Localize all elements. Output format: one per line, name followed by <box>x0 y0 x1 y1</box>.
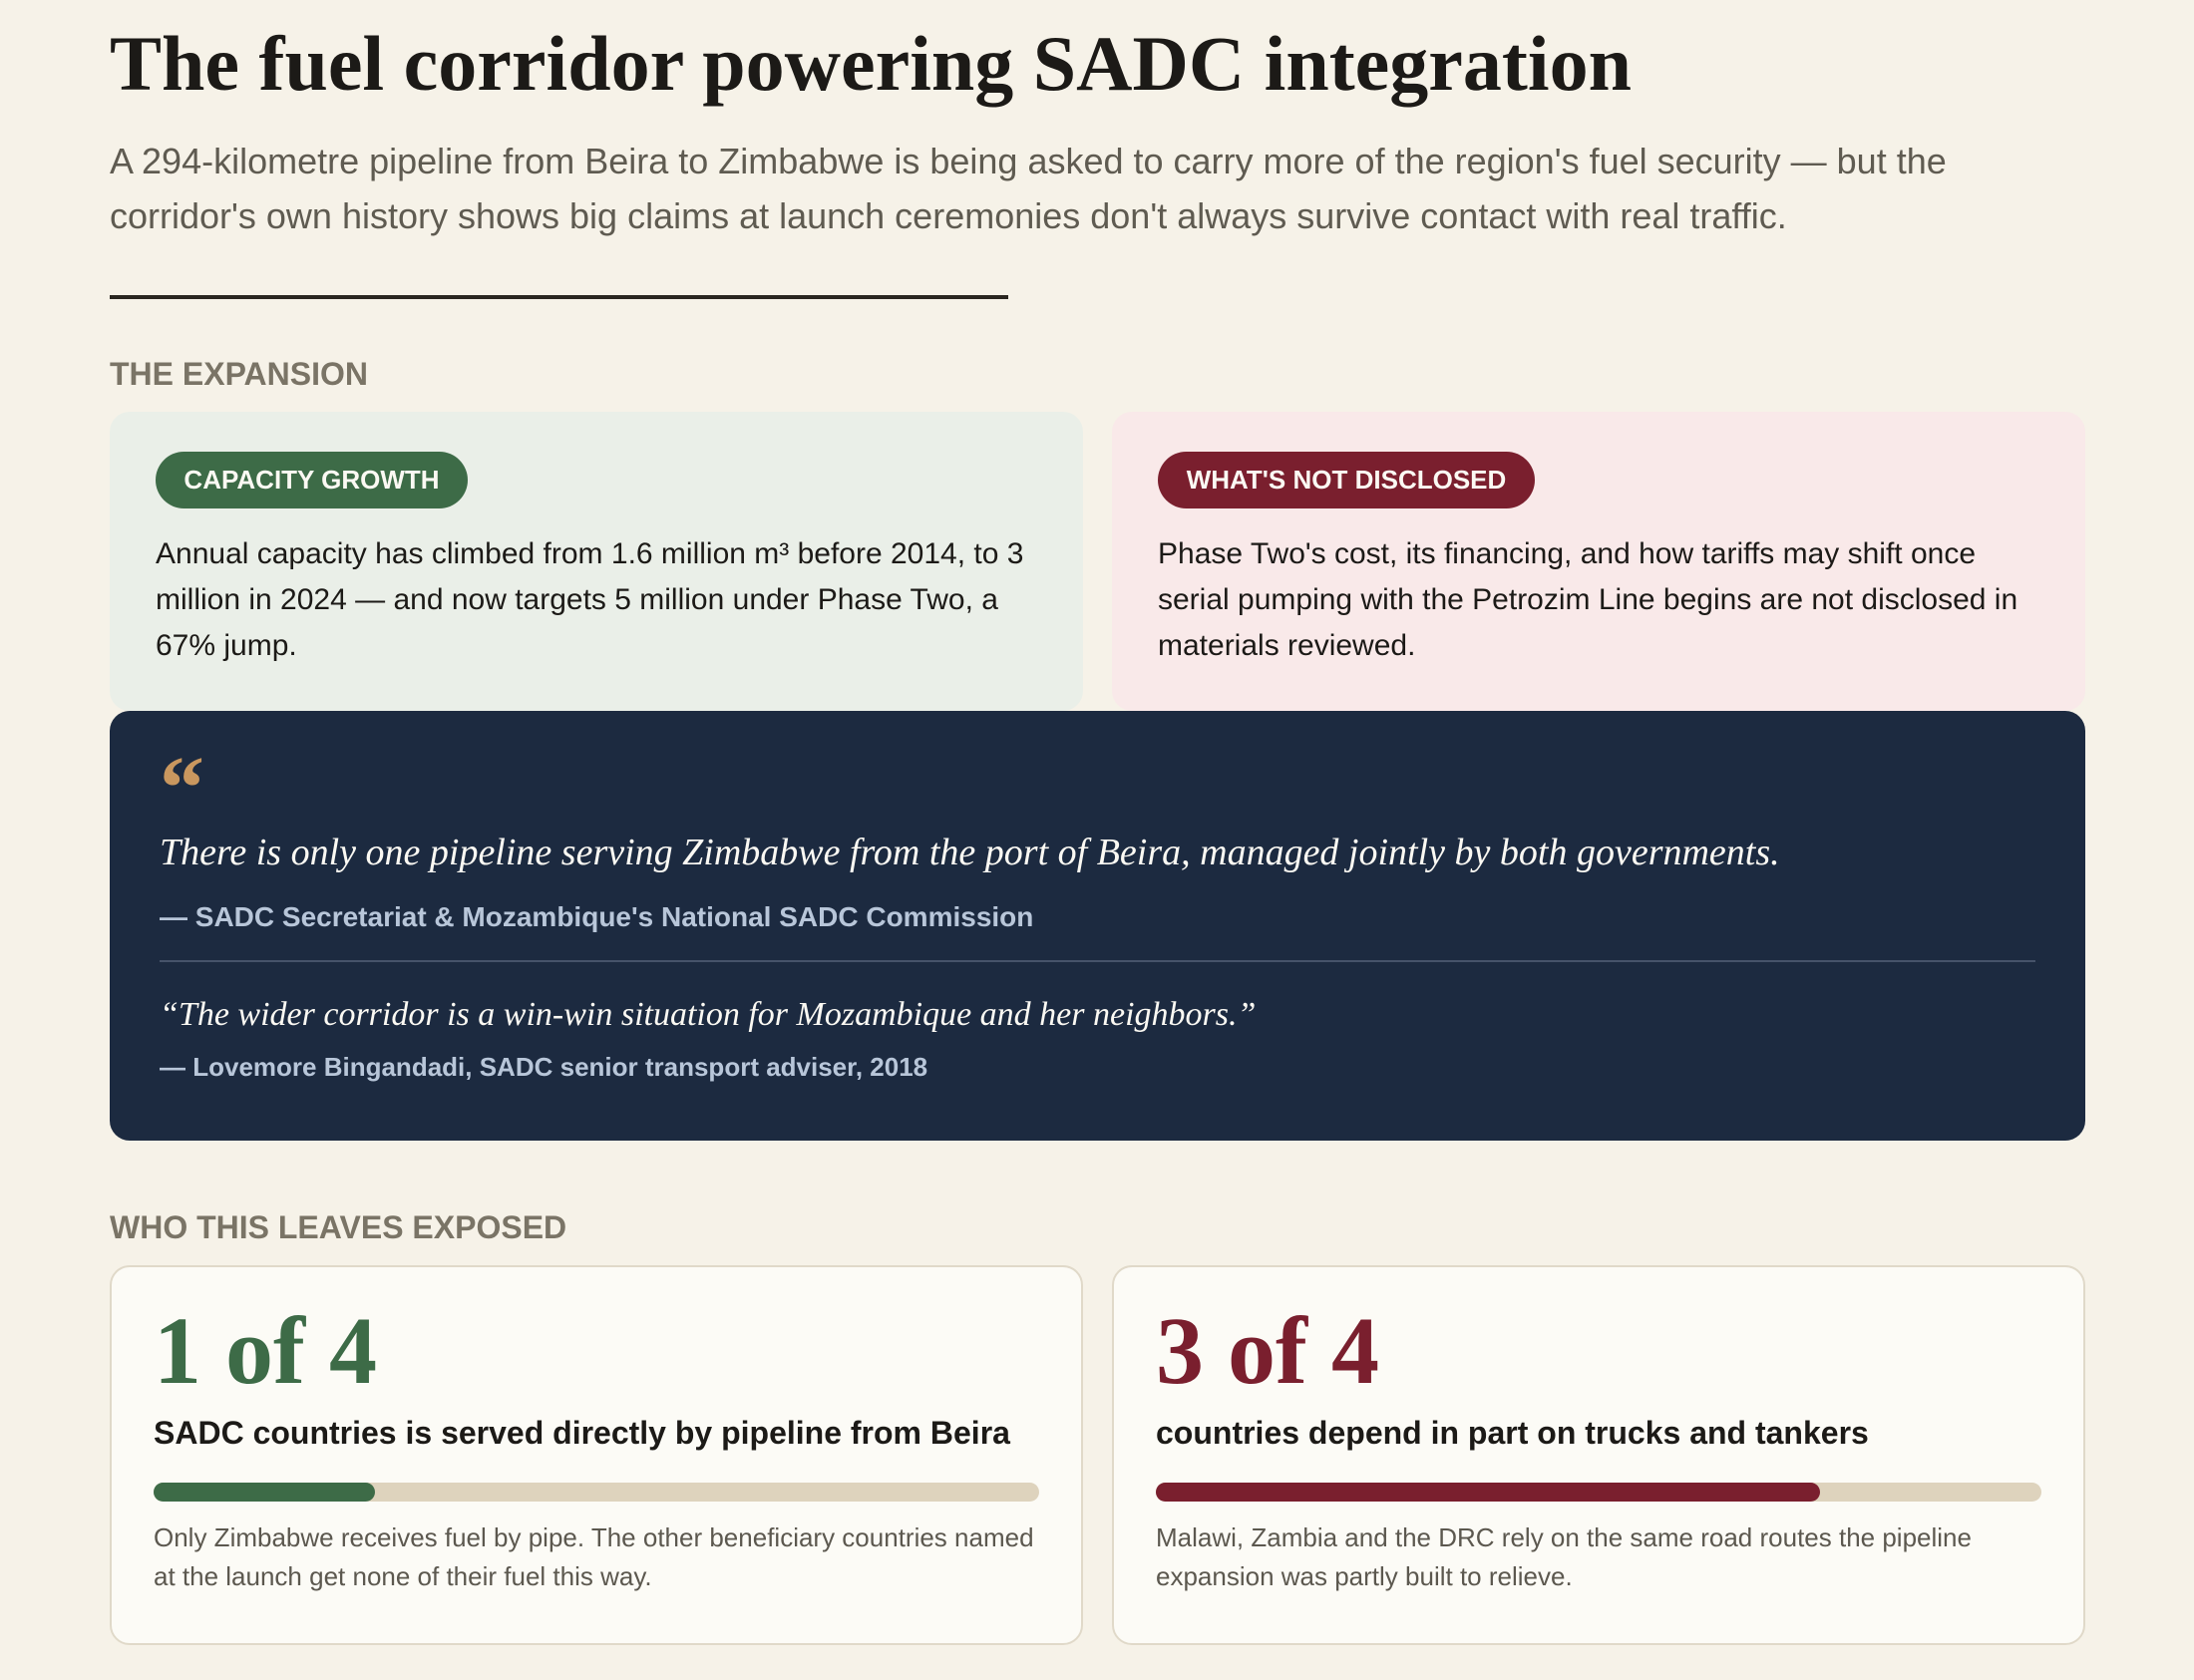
stat note: Malawi, Zambia and the DRC rely on the same road routes the pipeline <box>1156 1522 1972 1552</box>
quote one: There is only one pipeline serving Zimbabwe from the port of Beira, managed jointly by both governments. <box>160 832 1780 873</box>
stat: 3 of 4: 3 of 4 <box>1156 1297 1379 1404</box>
subtitle <box>110 141 1947 236</box>
title: The fuel corridor powering SADC integration <box>110 20 1632 107</box>
stat label: SADC countries is served directly by pipeline from Beira <box>154 1415 1010 1451</box>
panel: what's not disclosed <box>1112 412 2085 711</box>
progress bar: 25% <box>154 1483 1039 1502</box>
disclosure text <box>1158 537 2017 662</box>
badge: capacity growth: CAPACITY GROWTH <box>183 465 440 495</box>
disclosure text: materials reviewed. <box>1158 629 1415 662</box>
quote divider <box>160 960 2035 962</box>
section heading: the expansion: THE EXPANSION <box>110 356 368 392</box>
icon: quote mark: “ <box>160 739 204 838</box>
stat note: at the launch get none of their fuel this way. <box>154 1561 652 1591</box>
stat note <box>154 1522 1034 1591</box>
stat note: expansion was partly built to relieve. <box>1156 1561 1573 1591</box>
panel: capacity growth <box>110 412 1083 711</box>
panel: 1 of 4 <box>110 1265 1083 1645</box>
capacity text <box>156 537 1023 662</box>
capacity text: 67% jump. <box>156 629 297 662</box>
stat note <box>1156 1522 1972 1591</box>
disclosure text: Phase Two's cost, its financing, and how tariffs may shift once <box>1158 537 1976 570</box>
subtitle: corridor's own history shows big claims at launch ceremonies don't always survive contact with real traffic. <box>110 195 1787 236</box>
badge: what's not disclosed <box>1158 452 1535 508</box>
stat label: countries depend in part on trucks and tankers <box>1156 1415 1869 1451</box>
attribution one: — SADC Secretariat & Mozambique's National SADC Commission <box>160 901 1033 932</box>
badge: capacity growth <box>156 452 468 508</box>
badge: what's not disclosed: WHAT'S NOT DISCLOSED <box>1187 465 1506 495</box>
subtitle: A 294-kilometre pipeline from Beira to Zimbabwe is being asked to carry more of the region's fuel security — but the <box>110 141 1947 181</box>
capacity text: million in 2024 — and now targets 5 million under Phase Two, a <box>156 583 998 616</box>
header rule <box>110 295 1008 299</box>
attribution two: — Lovemore Bingandadi, SADC senior transport adviser, 2018 <box>160 1052 927 1082</box>
capacity text: Annual capacity has climbed from 1.6 million m³ before 2014, to 3 <box>156 537 1023 570</box>
panel: quotes <box>110 711 2085 1141</box>
panel: 3 of 4 <box>1112 1265 2085 1645</box>
quote two: “The wider corridor is a win-win situation for Mozambique and her neighbors.” <box>160 996 1256 1033</box>
disclosure text: serial pumping with the Petrozim Line begins are not disclosed in <box>1158 583 2017 616</box>
stat: 1 of 4: 1 of 4 <box>154 1297 377 1404</box>
section heading: who this leaves exposed: WHO THIS LEAVES EXPOSED <box>110 1209 566 1245</box>
progress bar: 75% <box>1156 1483 2041 1502</box>
stat note: Only Zimbabwe receives fuel by pipe. The other beneficiary countries named <box>154 1522 1034 1552</box>
